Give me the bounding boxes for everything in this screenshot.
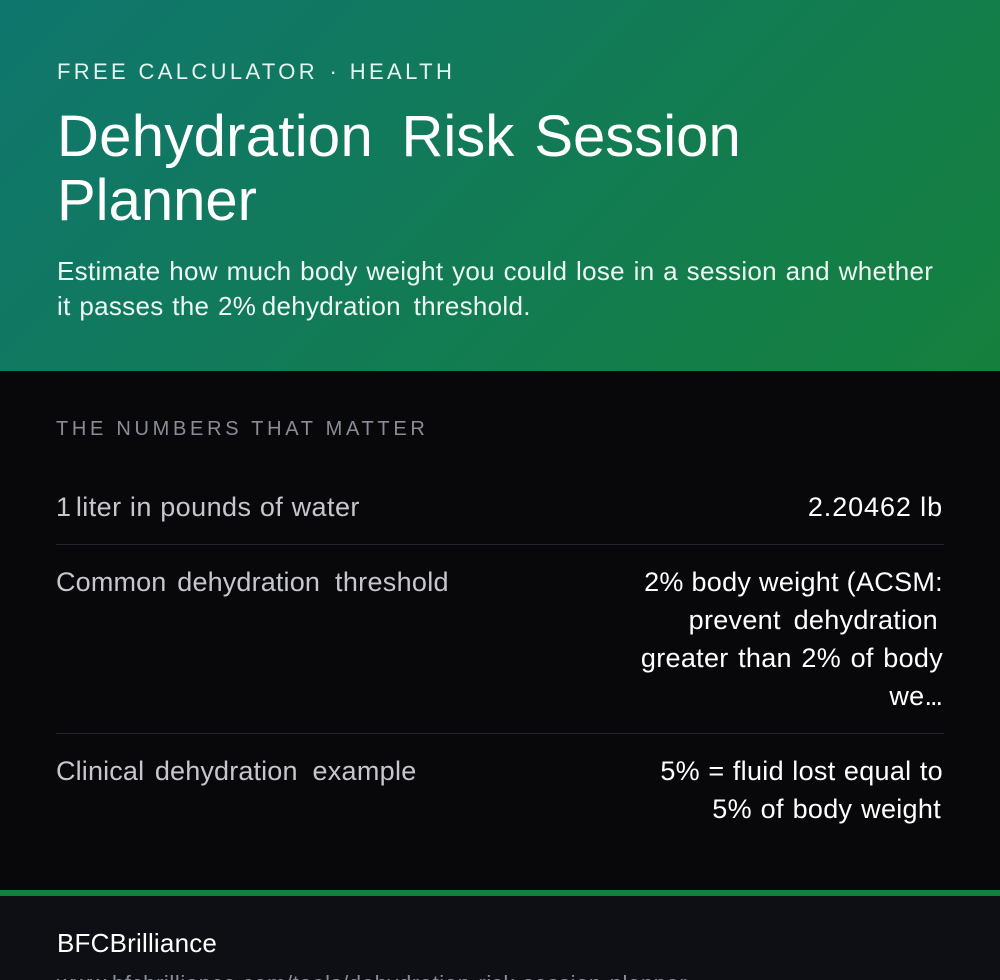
row label: Common dehydration threshold: [56, 567, 449, 597]
panel: the numbers that matter: [0, 371, 1000, 890]
title: Dehydration Risk Session: [57, 104, 741, 169]
title: Planner: [57, 168, 257, 233]
accent bar: [0, 890, 1000, 896]
section heading: THE NUMBERS THAT MATTER: [56, 418, 429, 440]
row value: 2% body weight (ACSM:: [644, 567, 943, 597]
row value: [641, 567, 943, 711]
row label: 1 liter in pounds of water: [56, 492, 360, 522]
description: it passes the 2% dehydration threshold.: [57, 291, 531, 321]
row value: 5% = fluid lost equal to: [660, 756, 943, 786]
description: [57, 256, 933, 321]
row value: greater than 2% of body: [641, 643, 943, 673]
row: 1 liter in pounds of water: [56, 492, 943, 522]
row: clinical dehydration example: [56, 756, 943, 824]
row label: Clinical dehydration example: [56, 756, 417, 786]
row value: 2.20462 lb: [808, 492, 943, 522]
title: [57, 104, 741, 233]
row: common dehydration threshold: [56, 567, 943, 711]
panel: header: [0, 0, 1000, 371]
panel: footer: [0, 896, 1000, 980]
brand name: BFCBrilliance: [57, 928, 217, 958]
eyebrow: FREE CALCULATOR · HEALTH: [57, 59, 455, 84]
row value: prevent dehydration: [689, 605, 938, 635]
row value: 5% of body weight: [712, 794, 941, 824]
description: Estimate how much body weight you could lose in a session and whether: [57, 256, 933, 286]
row value: [660, 756, 943, 824]
row value: we...: [889, 681, 941, 711]
